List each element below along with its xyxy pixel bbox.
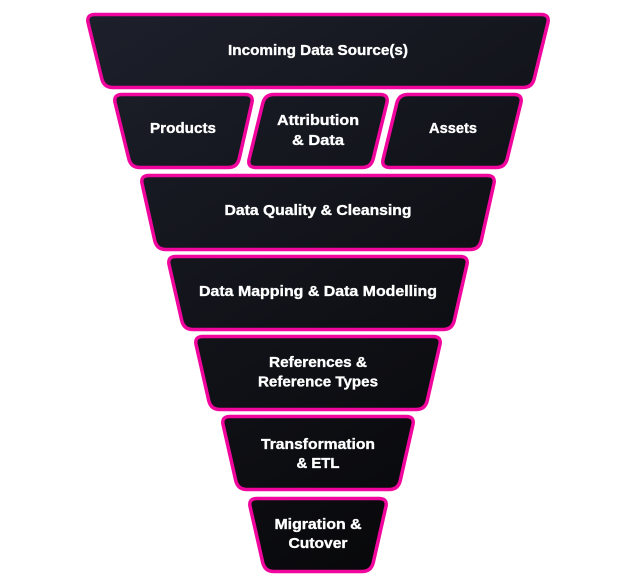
tier: References & Reference Types: References &: [269, 354, 367, 371]
tier: Data Mapping & Data Modelling: Data Mapping & Data Modelling: [199, 283, 437, 300]
tier: Incoming Data Source(s): Incoming Data Source(s): [228, 42, 408, 59]
tier: Data Mapping & Data Modelling: [169, 256, 467, 330]
tier: Migration & Cutover: Migration &: [274, 516, 362, 533]
tier: Transformation & ETL: [223, 416, 413, 490]
tier: References & Reference Types: Reference Types: [258, 374, 378, 390]
tier: Attribution & Data: Attribution: [277, 112, 359, 129]
tier: Assets: [383, 94, 521, 168]
tier: Data Quality & Cleansing: [142, 176, 494, 250]
tier: Incoming Data Source(s): [88, 14, 548, 88]
tier: Products: Products: [150, 120, 216, 137]
tier: Attribution & Data: & Data: [292, 132, 345, 149]
tier: Assets: Assets: [429, 120, 477, 137]
tier: Attribution & Data: [249, 94, 387, 168]
tier: Transformation & ETL: Transformation: [261, 436, 375, 453]
tier: References & Reference Types: [196, 336, 440, 410]
tier: Migration & Cutover: [250, 498, 386, 572]
tier: Products: [115, 94, 252, 168]
tier: Data Quality & Cleansing: Data Quality & Cleansing: [224, 202, 412, 219]
tier: Migration & Cutover: Cutover: [288, 535, 348, 552]
tier: Transformation & ETL: & ETL: [296, 455, 340, 472]
